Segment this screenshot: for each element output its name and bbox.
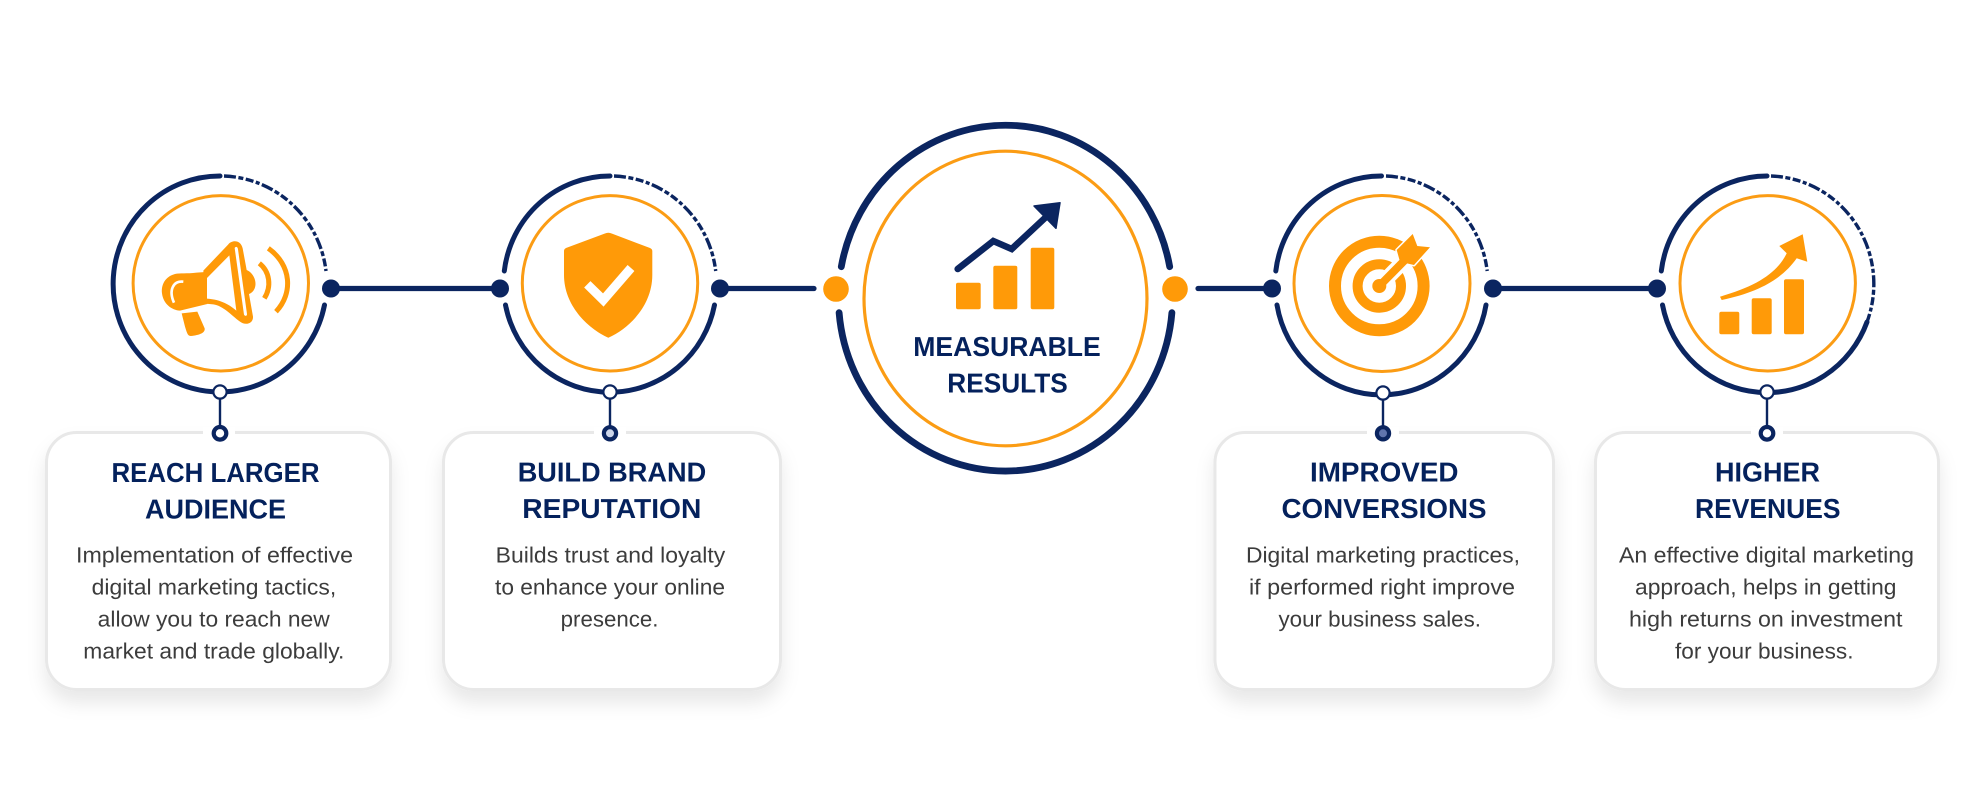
centre hub: measurable results xyxy=(839,125,1172,471)
connector lines between circles xyxy=(331,286,1657,291)
text: higher revenues description: high returns on investment xyxy=(1629,606,1902,632)
icon: rising bars with arrow xyxy=(956,203,1060,309)
heading: reach larger audience: REACH LARGER xyxy=(112,457,320,488)
text: higher revenues description: approach, helps in getting xyxy=(1635,574,1896,600)
heading: build brand reputation: BUILD BRAND xyxy=(518,456,706,488)
step 1: reach larger audience xyxy=(46,176,390,690)
card: improved conversions xyxy=(1215,427,1554,690)
icon: target with arrow xyxy=(1335,234,1430,330)
text: reach larger audience description: digital marketing tactics, xyxy=(92,574,336,600)
text: higher revenues description xyxy=(1619,542,1914,664)
icon: megaphone xyxy=(162,241,288,336)
text: reach larger audience description: market and trade globally. xyxy=(83,638,344,664)
text: higher revenues description: for your business. xyxy=(1675,638,1854,664)
heading: measurable results: MEASURABLE xyxy=(913,331,1101,362)
text: improved conversions description: if performed right improve xyxy=(1249,574,1515,600)
circle ring: step 4 xyxy=(1276,176,1487,395)
heading: measurable results: RESULTS xyxy=(947,368,1068,398)
text: build brand reputation description: presence. xyxy=(561,606,658,632)
connector: step 4 to card xyxy=(1376,386,1390,439)
navy connector dots xyxy=(322,280,1666,298)
text: higher revenues description: An effective digital marketing xyxy=(1619,542,1914,568)
heading: higher revenues: REVENUES xyxy=(1695,493,1840,524)
heading: measurable results xyxy=(913,331,1101,398)
circle ring: step 1 xyxy=(113,176,326,392)
text: improved conversions description: your business sales. xyxy=(1278,606,1481,632)
text: improved conversions description: Digital marketing practices, xyxy=(1246,542,1520,568)
heading: improved conversions xyxy=(1282,456,1486,524)
connector: step 5 to card xyxy=(1760,385,1774,440)
text: build brand reputation description: Builds trust and loyalty xyxy=(496,542,725,568)
text: reach larger audience description xyxy=(76,542,353,664)
heading: improved conversions: CONVERSIONS xyxy=(1282,493,1486,524)
text: improved conversions description xyxy=(1246,542,1520,632)
orange hub dots xyxy=(823,276,1188,302)
heading: improved conversions: IMPROVED xyxy=(1310,456,1458,488)
text: reach larger audience description: allow you to reach new xyxy=(98,606,330,632)
card: reach larger audience xyxy=(46,427,390,690)
connector: step 1 to card xyxy=(213,385,227,440)
card: higher revenues xyxy=(1596,427,1938,690)
heading: reach larger audience: AUDIENCE xyxy=(145,494,286,524)
icon: shield with check xyxy=(564,233,652,338)
heading: higher revenues: HIGHER xyxy=(1715,456,1820,488)
text: build brand reputation description: to enhance your online xyxy=(495,574,725,600)
card: build brand reputation xyxy=(444,427,780,690)
connector: step 2 to card xyxy=(603,385,617,439)
hub rings xyxy=(839,125,1172,471)
circle ring: step 5 xyxy=(1661,176,1874,393)
text: build brand reputation description xyxy=(495,542,725,632)
heading: reach larger audience xyxy=(112,457,320,524)
icon: bars with orange arrow xyxy=(1719,234,1807,334)
text: reach larger audience description: Implementation of effective xyxy=(76,542,353,568)
step 5: higher revenues xyxy=(1596,176,1938,690)
heading: build brand reputation xyxy=(518,456,706,524)
step 2: build brand reputation xyxy=(444,176,780,690)
step 4: improved conversions xyxy=(1215,176,1554,690)
circle ring: step 2 xyxy=(504,176,716,392)
heading: build brand reputation: REPUTATION xyxy=(522,493,701,524)
heading: higher revenues xyxy=(1695,456,1840,524)
